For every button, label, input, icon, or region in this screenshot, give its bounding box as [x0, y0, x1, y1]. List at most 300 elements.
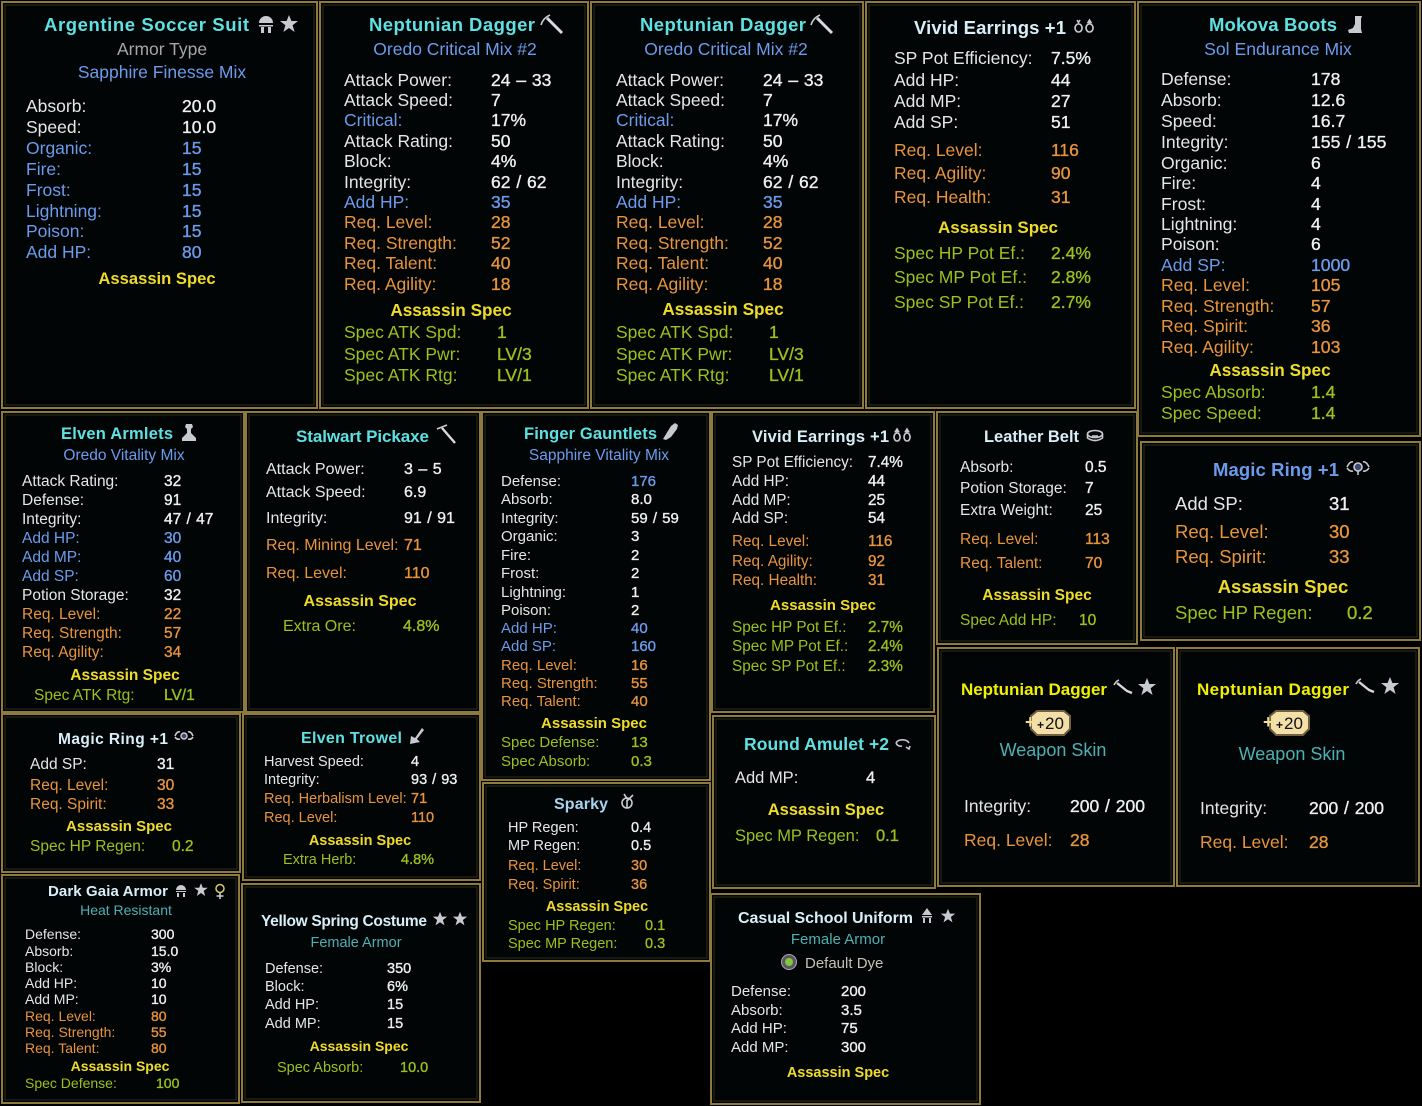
spec stats: LV/1 — [497, 365, 532, 385]
stats: Absorb: — [960, 459, 1013, 476]
stats: 44 — [868, 473, 886, 490]
stats: 4 — [1311, 194, 1321, 214]
stats — [22, 473, 213, 661]
stats: 60 — [164, 568, 182, 585]
title: Elven Armlets — [61, 425, 173, 443]
stats: 30 — [164, 530, 182, 547]
icon: star — [433, 912, 447, 925]
icon: trowel — [410, 728, 424, 744]
stats: Req. Strength: — [25, 1024, 115, 1040]
spec heading: Assassin Spec — [787, 1065, 889, 1081]
stats: Potion Storage: — [22, 587, 129, 604]
stats: Attack Speed: — [266, 484, 366, 501]
spec stats — [616, 322, 804, 385]
mix name: Sol Endurance Mix — [1204, 39, 1352, 59]
spec stats: Spec HP Regen: — [1175, 602, 1312, 623]
spec stats: Spec ATK Rtg: — [344, 365, 457, 385]
stats: Req. Level: — [1161, 275, 1250, 295]
spec stats: 0.1 — [876, 827, 899, 845]
title: Sparky — [554, 796, 608, 813]
spec stats: 0.2 — [1347, 602, 1373, 623]
stats: Req. Level: — [22, 606, 100, 623]
stats: 200 / 200 — [1309, 798, 1384, 818]
spec stats: Spec Absorb: — [501, 753, 590, 770]
stats: Organic: — [1161, 153, 1228, 173]
stats: Speed: — [26, 117, 81, 137]
stats: 6 — [1311, 234, 1321, 254]
stats — [1161, 69, 1387, 357]
stats: Add SP: — [22, 568, 79, 585]
stats: 4% — [491, 151, 516, 171]
stats: 30 — [631, 858, 647, 874]
stats: 75 — [841, 1020, 858, 1037]
title: Mokova Boots — [1209, 14, 1337, 35]
stats: Lightning: — [1161, 214, 1237, 234]
stats: 35 — [491, 192, 510, 212]
stats: 90 — [1051, 163, 1071, 183]
spec stats: 2.8% — [1051, 267, 1091, 287]
stats: 4 — [411, 754, 419, 770]
icon: star — [194, 883, 208, 896]
icon: dagger — [1114, 680, 1132, 693]
stats: Frost: — [1161, 194, 1206, 214]
stats: Frost: — [501, 565, 539, 582]
stats: 10.0 — [182, 117, 216, 137]
stats: 103 — [1311, 337, 1341, 357]
spec stats: 2.4% — [868, 638, 903, 655]
stats: Req. Spirit: — [1175, 546, 1267, 567]
stats: 40 — [631, 620, 648, 637]
stats: Attack Rating: — [616, 131, 725, 151]
stats: Req. Level: — [964, 830, 1053, 850]
stats: Req. Agility: — [1161, 337, 1254, 357]
mix name: Sapphire Vitality Mix — [529, 447, 669, 464]
dye label: Default Dye — [805, 955, 883, 972]
stats: Req. Strength: — [22, 625, 122, 642]
stats: Add HP: — [344, 192, 409, 212]
panel: Stalwart Pickaxe — [246, 412, 480, 712]
stats: Add MP: — [731, 1039, 789, 1056]
stats: 15 — [387, 997, 403, 1013]
stats: 110 — [404, 565, 430, 582]
stats: 40 — [631, 693, 648, 710]
mix name: Sapphire Finesse Mix — [78, 62, 246, 82]
spec stats — [1161, 382, 1336, 423]
stats: Poison: — [26, 221, 84, 241]
spec stats: 2.3% — [868, 658, 903, 675]
stats: Add HP: — [616, 192, 681, 212]
stats: 0.5 — [631, 838, 651, 854]
spec stats: Spec SP Pot Ef.: — [894, 292, 1024, 312]
stats: Req. Mining Level: — [266, 537, 399, 554]
spec stats: Spec HP Pot Ef.: — [894, 243, 1025, 263]
icon: dagger — [1356, 679, 1374, 692]
stats: 10 — [151, 991, 167, 1007]
stats: Req. Level: — [344, 212, 433, 232]
stats: Req. Strength: — [616, 233, 729, 253]
panel: Vivid Earrings small — [712, 412, 934, 712]
spec stats: LV/1 — [164, 687, 195, 704]
panel: Round Amulet — [713, 716, 935, 888]
stats: Req. Talent: — [25, 1040, 99, 1056]
item type: Weapon Skin — [1239, 744, 1345, 764]
spec stats — [501, 734, 652, 770]
stats: Attack Speed: — [344, 90, 453, 110]
stats: Req. Strength: — [1161, 296, 1274, 316]
stats: 22 — [164, 606, 181, 623]
stats: Add SP: — [1175, 493, 1243, 514]
spec stats: 0.1 — [645, 918, 665, 934]
spec stats: Extra Herb: — [283, 852, 356, 868]
stats: 32 — [164, 473, 181, 490]
stats: Req. Talent: — [960, 555, 1042, 572]
stats: Add MP: — [732, 492, 791, 509]
spec stats: Spec ATK Rtg: — [34, 687, 135, 704]
stats: 200 / 200 — [1070, 796, 1145, 816]
stats: MP Regen: — [508, 838, 580, 854]
spec stats: 0.2 — [172, 838, 194, 855]
stats: Add HP: — [22, 530, 80, 547]
stats — [960, 459, 1110, 572]
panel: Neptunian Dagger 2 — [591, 2, 863, 408]
stats — [264, 754, 457, 826]
stats: Add SP: — [732, 510, 788, 527]
stats: 36 — [1311, 316, 1331, 336]
stats: Integrity: — [1161, 132, 1228, 152]
stats: Defense: — [265, 961, 323, 977]
stats: 33 — [1329, 546, 1350, 567]
icon: earrings — [1075, 20, 1093, 32]
stats: 15 — [182, 201, 201, 221]
title: Argentine Soccer Suit — [44, 14, 249, 35]
icon: ring — [175, 732, 193, 739]
stats: 6.9 — [404, 484, 426, 501]
icon: star — [280, 15, 298, 32]
stats: 36 — [631, 877, 647, 893]
spec stats — [344, 322, 532, 385]
stats: 28 — [491, 212, 510, 232]
stats: 34 — [164, 644, 182, 661]
spec stats: 4.8% — [401, 852, 434, 868]
stats: Add MP: — [735, 769, 798, 787]
title: Casual School Uniform — [738, 910, 913, 927]
mix name: Oredo Critical Mix #2 — [644, 39, 808, 59]
panel: Neptunian Dagger skin 2 — [1177, 648, 1419, 886]
stats: Add SP: — [894, 112, 958, 132]
stats: Extra Weight: — [960, 502, 1053, 519]
title: Vivid Earrings +1 — [752, 428, 889, 446]
spec stats: LV/3 — [497, 344, 532, 364]
icon: armor — [259, 16, 273, 33]
stats: Add HP: — [265, 997, 319, 1013]
title: Neptunian Dagger — [961, 680, 1107, 699]
stats: Block: — [616, 151, 664, 171]
stats: Attack Power: — [266, 461, 365, 478]
stats: Integrity: — [964, 796, 1031, 816]
stats: 30 — [157, 777, 175, 794]
badge: +20 — [1025, 711, 1070, 735]
spec stats: 100 — [156, 1075, 180, 1091]
stats: Integrity: — [616, 172, 683, 192]
badge: +20: 20 — [1045, 714, 1064, 733]
spec heading: Assassin Spec — [938, 218, 1058, 237]
stats: Attack Rating: — [344, 131, 453, 151]
stats: Add HP: — [732, 473, 789, 490]
stats — [894, 48, 1091, 207]
stats: Integrity: — [264, 772, 320, 788]
stats: Add SP: — [1161, 255, 1226, 275]
stats: 93 / 93 — [411, 772, 457, 788]
stats: Add MP: — [22, 549, 81, 566]
stats: Fire: — [26, 159, 61, 179]
spec heading: Assassin Spec — [541, 715, 647, 732]
stats: Lightning: — [26, 201, 102, 221]
stats: Req. Level: — [501, 657, 577, 674]
stats: Req. Talent: — [344, 253, 437, 273]
stats: 28 — [1309, 832, 1328, 852]
stats — [1175, 493, 1350, 567]
stats: Req. Health: — [894, 187, 991, 207]
stats: Fire: — [501, 547, 531, 564]
stats: Req. Level: — [732, 533, 809, 550]
spec stats: 1.4 — [1311, 403, 1336, 423]
stats: Req. Spirit: — [30, 796, 107, 813]
title: Neptunian Dagger — [640, 14, 806, 35]
spec stats: Extra Ore: — [283, 618, 356, 635]
stats: 113 — [1085, 531, 1110, 548]
panel: Argentine Soccer Suit — [2, 2, 317, 408]
stats: Block: — [344, 151, 392, 171]
spec heading: Assassin Spec — [1218, 576, 1348, 597]
stats: Frost: — [26, 180, 71, 200]
panel: Casual School Uniform — [711, 894, 980, 1104]
spec heading: Assassin Spec — [71, 1058, 170, 1074]
stats: 350 — [387, 961, 411, 977]
title: Magic Ring +1 — [1213, 459, 1339, 480]
spec stats: Spec ATK Pwr: — [344, 344, 460, 364]
stats: Req. Level: — [960, 531, 1038, 548]
spec stats: Spec MP Regen: — [508, 936, 617, 952]
spec stats: Spec HP Regen: — [30, 838, 145, 855]
stats: Defense: — [1161, 69, 1231, 89]
stats: 18 — [763, 274, 782, 294]
stats: 7 — [763, 90, 773, 110]
stats: Block: — [25, 959, 63, 975]
title: Neptunian Dagger — [369, 14, 535, 35]
spec heading: Assassin Spec — [982, 587, 1092, 604]
stats: Req. Spirit: — [508, 877, 580, 893]
stats: 3 — [631, 528, 639, 545]
stats: Req. Level: — [264, 810, 337, 826]
stats: Integrity: — [266, 510, 327, 527]
spec heading: Assassin Spec — [546, 899, 648, 915]
spec stats: 2.7% — [1051, 292, 1091, 312]
icon: dagger — [811, 15, 832, 33]
spec stats: 10.0 — [400, 1060, 428, 1076]
stats — [731, 983, 866, 1056]
stats: 300 — [841, 1039, 866, 1056]
spec stats: 0.3 — [645, 936, 665, 952]
spec stats: Spec Absorb: — [277, 1060, 363, 1076]
stats — [964, 796, 1145, 850]
title: Magic Ring +1 — [58, 731, 168, 748]
stats: 116 — [868, 533, 892, 550]
item type: Weapon Skin — [1000, 740, 1106, 760]
panel: Leather Belt — [937, 412, 1137, 644]
stats — [1200, 798, 1384, 852]
icon: gender symbol — [216, 884, 224, 899]
stats: Req. Spirit: — [1161, 316, 1248, 336]
stats: Potion Storage: — [960, 480, 1067, 497]
stats: Req. Level: — [1175, 521, 1269, 542]
spec heading: Assassin Spec — [304, 593, 417, 610]
stats: 50 — [763, 131, 783, 151]
stats — [25, 926, 178, 1056]
spec stats: Spec Absorb: — [1161, 382, 1266, 402]
stats: 30 — [1329, 521, 1350, 542]
spec stats — [508, 918, 665, 952]
spec stats: Spec Defense: — [25, 1075, 117, 1091]
stats: Add MP: — [894, 91, 961, 111]
stats — [732, 454, 903, 589]
stats: 110 — [411, 810, 434, 826]
stats: 51 — [1051, 112, 1070, 132]
stats: 15 — [387, 1016, 403, 1032]
stats: 2 — [631, 547, 639, 564]
stats: Integrity: — [22, 511, 81, 528]
badge: +20: + — [1025, 712, 1036, 732]
spec stats: Spec ATK Rtg: — [616, 365, 729, 385]
stats: Add HP: — [26, 242, 91, 262]
title: Leather Belt — [984, 428, 1080, 446]
spec stats: Spec Speed: — [1161, 403, 1262, 423]
stats: Req. Health: — [732, 572, 817, 589]
stats: Req. Strength: — [501, 675, 598, 692]
spec heading: Assassin Spec — [662, 299, 784, 319]
spec stats: 2.4% — [1051, 243, 1091, 263]
spec heading: Assassin Spec — [768, 801, 884, 819]
stats — [265, 961, 411, 1032]
icon: boot — [1348, 16, 1362, 33]
spec stats: 4.8% — [403, 618, 439, 635]
spec heading: Assassin Spec — [309, 833, 411, 849]
stats — [616, 70, 823, 294]
stats: 55 — [151, 1024, 167, 1040]
stats: Defense: — [501, 473, 561, 490]
stats: Add HP: — [894, 70, 959, 90]
stats: 35 — [763, 192, 782, 212]
spec stats — [894, 243, 1091, 312]
spec stats: 1.4 — [1311, 382, 1336, 402]
panel: Magic Ring large — [1141, 442, 1420, 640]
stats: Req. Agility: — [616, 274, 708, 294]
stats: 4 — [866, 769, 875, 787]
spec stats: 10 — [1079, 612, 1097, 629]
stats: 200 — [841, 983, 866, 1000]
stats: 16.7 — [1311, 111, 1345, 131]
icon: pickaxe — [437, 425, 455, 443]
icon: ring — [1347, 462, 1369, 475]
stats: Poison: — [501, 602, 551, 619]
icon: star — [1381, 677, 1399, 694]
stats: Integrity: — [1200, 798, 1267, 818]
stats: Integrity: — [501, 510, 559, 527]
stats: Attack Rating: — [22, 473, 118, 490]
stats: Req. Talent: — [616, 253, 709, 273]
stats: 62 / 62 — [763, 172, 819, 192]
stats: 80 — [182, 242, 202, 262]
item type: Female Armor — [791, 931, 885, 948]
stats: Organic: — [501, 528, 558, 545]
stats: 25 — [868, 492, 885, 509]
spec stats: LV/3 — [769, 344, 804, 364]
stats: 15 — [182, 138, 201, 158]
stats: 4% — [763, 151, 788, 171]
panel: Neptunian Dagger 1 — [320, 2, 588, 408]
stats: 2 — [631, 565, 639, 582]
spec stats: 1 — [497, 322, 507, 342]
stats: 27 — [1051, 91, 1070, 111]
spec stats: 1 — [769, 322, 779, 342]
spec heading: Assassin Spec — [770, 597, 876, 614]
stats: Req. Level: — [25, 1008, 96, 1024]
badge: +20: + — [1263, 712, 1274, 732]
stats: 91 / 91 — [404, 510, 455, 527]
stats: 91 — [164, 492, 181, 509]
stats — [26, 96, 216, 262]
spec stats: Spec Add HP: — [960, 612, 1057, 629]
stats: 71 — [411, 791, 427, 807]
stats: 1000 — [1311, 255, 1350, 275]
stats: 59 / 59 — [631, 510, 679, 527]
stats: 160 — [631, 638, 656, 655]
stats: 92 — [868, 553, 885, 570]
stats: Req. Level: — [30, 777, 108, 794]
spec stats: Spec ATK Spd: — [344, 322, 461, 342]
spec heading: Assassin Spec — [310, 1038, 409, 1054]
spec stats: 0.3 — [631, 753, 652, 770]
stats: 31 — [1051, 187, 1070, 207]
stats — [344, 70, 551, 294]
spec stats: Spec MP Pot Ef.: — [732, 638, 848, 655]
badge: +20: + — [1276, 718, 1283, 732]
stats: Req. Level: — [894, 140, 983, 160]
stats: 6% — [387, 979, 408, 995]
stats: Fire: — [1161, 173, 1196, 193]
spec stats: Spec HP Pot Ef.: — [732, 619, 847, 636]
spec stats: Spec ATK Spd: — [616, 322, 733, 342]
badge: +20: + — [1037, 718, 1044, 732]
title: Elven Trowel — [301, 730, 402, 747]
stats: 62 / 62 — [491, 172, 547, 192]
stats: Req. Level: — [1200, 832, 1289, 852]
spec stats: Spec ATK Pwr: — [616, 344, 732, 364]
stats: Attack Power: — [344, 70, 452, 90]
stats: 300 — [151, 926, 175, 942]
spec stats: Spec Defense: — [501, 734, 599, 751]
title: Round Amulet +2 — [744, 734, 889, 754]
stats: Req. Agility: — [894, 163, 986, 183]
title: Finger Gauntlets — [524, 425, 657, 443]
stats: Req. Talent: — [501, 693, 581, 710]
stats: 52 — [763, 233, 782, 253]
item type: Heat Resistant — [80, 902, 172, 918]
stats: Poison: — [1161, 234, 1220, 254]
stats: 80 — [151, 1008, 167, 1024]
stats: 3 – 5 — [404, 461, 442, 478]
spec stats: Spec MP Regen: — [735, 827, 859, 845]
stats: Critical: — [616, 110, 674, 130]
